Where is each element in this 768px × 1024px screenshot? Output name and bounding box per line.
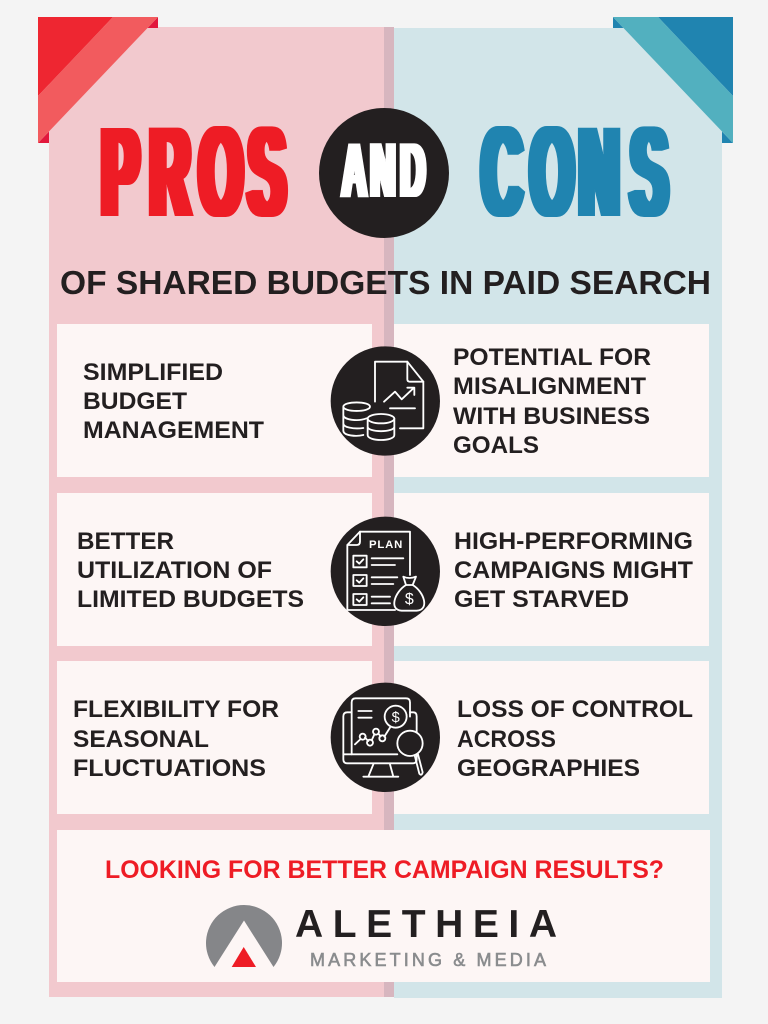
text: potential for misalignment: GOALS: [453, 432, 539, 459]
text: loss of control: [457, 696, 693, 782]
card: pro 3: [57, 661, 372, 814]
text: better utilization: LIMITED BUDGETS: [77, 586, 304, 613]
text: loss of control: ACROSS: [457, 726, 556, 753]
panel: pros background: [49, 27, 385, 997]
corner ribbon: top right: [613, 17, 733, 143]
text: call to action: LOOKING FOR BETTER CAMPAIGN RESULTS?: [105, 856, 664, 884]
text: potential for misalignment: [453, 344, 651, 459]
card: con 2: [394, 493, 709, 646]
text: high-performing campaigns: GET STARVED: [454, 586, 629, 613]
card: con 1: [394, 324, 709, 477]
text: high-performing campaigns: [454, 528, 693, 613]
icon: document and coins: [331, 346, 440, 456]
text: simplified budget management: [83, 359, 264, 444]
text: potential for misalignment: POTENTIAL FOR: [453, 344, 651, 371]
text: simplified budget management: BUDGET: [83, 388, 187, 415]
icon: plan checklist with money bag: $: [405, 591, 414, 608]
text: simplified budget management: SIMPLIFIED: [83, 359, 223, 386]
text: high-performing campaigns: CAMPAIGNS MIGHT: [454, 557, 693, 584]
heading: cons: CONS: [482, 100, 668, 243]
text: better utilization: UTILIZATION OF: [77, 557, 272, 584]
text: flexibility: FLUCTUATIONS: [73, 755, 266, 782]
text: potential for misalignment: MISALIGNMENT: [453, 373, 646, 400]
logo mark: [206, 905, 282, 967]
text: flexibility: [73, 696, 279, 782]
text: loss of control: GEOGRAPHIES: [457, 755, 640, 782]
card: pro 1: [57, 324, 372, 477]
logo wordmark: ALETHEIA: [295, 903, 557, 946]
subtitle: OF SHARED BUDGETS IN PAID SEARCH: [60, 264, 711, 301]
corner ribbon: top left: [38, 17, 158, 143]
icon: monitor with chart and magnifier: [331, 683, 440, 792]
text: flexibility: SEASONAL: [73, 726, 209, 753]
badge: and: [319, 108, 449, 238]
text: better utilization: BETTER: [77, 528, 174, 555]
heading: pros: PROS: [102, 100, 285, 243]
card: con 3: [394, 661, 709, 814]
text: flexibility: FLEXIBILITY FOR: [73, 696, 279, 723]
text: simplified budget management: MANAGEMENT: [83, 417, 264, 444]
icon: plan checklist with money bag: PLAN: [369, 539, 402, 551]
badge: and: AND: [342, 126, 425, 214]
panel: cons background: [394, 28, 722, 998]
text: better utilization: [77, 528, 304, 613]
icon: monitor with chart and magnifier: $: [392, 710, 400, 726]
card: pro 2: [57, 493, 372, 646]
text: loss of control: LOSS OF CONTROL: [457, 696, 693, 723]
center overlap band: [384, 27, 394, 997]
text: potential for misalignment: WITH BUSINESS: [453, 403, 650, 430]
logo tagline: MARKETING & MEDIA: [310, 950, 546, 970]
card: call to action and logo: [57, 830, 710, 982]
text: high-performing campaigns: HIGH-PERFORMING: [454, 528, 693, 555]
icon: plan checklist with money bag: [331, 517, 440, 626]
